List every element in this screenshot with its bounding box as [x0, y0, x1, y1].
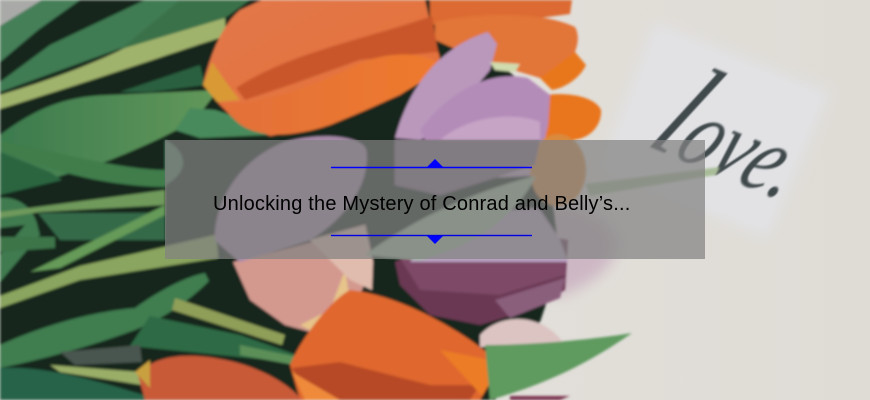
panel: title overlay: [165, 140, 705, 259]
pink petal bottom right: [480, 319, 566, 347]
dividers with triangles: [331, 159, 532, 244]
small red tulip: [138, 356, 302, 400]
mauve tulip behind panel: [215, 136, 367, 262]
dark purple tulip lower: [395, 236, 568, 325]
sage leaf behind panel: [410, 209, 568, 262]
orange tulip lower: [290, 290, 497, 400]
green leaf: [485, 333, 632, 400]
big leaf: [0, 90, 218, 195]
love card: [600, 22, 856, 238]
orange tulips top right: [430, 0, 572, 25]
top-left leaves: [0, 0, 80, 62]
dark foliage base: [0, 0, 560, 400]
pink tulip lower: [233, 225, 373, 334]
orange bud behind panel: [530, 134, 586, 206]
light stem: [0, 18, 226, 109]
title: Unlocking the Mystery of Conrad and Belly’s...: [213, 193, 630, 215]
purple tulip upper: [395, 32, 497, 140]
grey corner: [0, 0, 42, 26]
lower blades: [0, 141, 166, 187]
handwritten love: love.: [627, 41, 856, 225]
soft lilac petals right of the bouquet: [540, 204, 618, 296]
light stem across panel: [585, 167, 720, 196]
orange tulip 1: [203, 0, 440, 136]
